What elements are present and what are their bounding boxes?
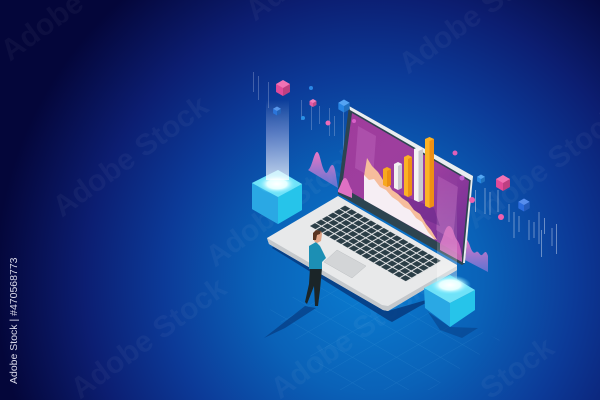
screen chart: [364, 137, 440, 240]
head: [314, 231, 322, 243]
blue cube: [273, 106, 281, 116]
left light beam: [266, 100, 289, 180]
screen table right: [436, 176, 458, 240]
blue dot: [301, 116, 305, 120]
laptop base: [267, 196, 457, 311]
bar chart shadow: [380, 186, 440, 226]
wave on screen bottom left: [338, 178, 352, 198]
pink dot: [469, 197, 475, 203]
bar 4: [414, 147, 423, 202]
keyboard: [309, 205, 442, 282]
hair: [313, 230, 321, 240]
floor grid: [270, 270, 500, 390]
blue cube: [518, 198, 530, 212]
person: [264, 230, 326, 338]
right data ticks: [476, 188, 556, 257]
blue dot: [309, 86, 313, 90]
pink dot: [452, 150, 458, 156]
torso: [309, 242, 326, 269]
bar 1: [383, 167, 391, 187]
trackpad: [324, 250, 366, 278]
right glowing cube: [424, 275, 478, 338]
wave on screen bottom right: [440, 226, 462, 262]
left glowing cube: [252, 170, 302, 224]
blue cube: [477, 174, 485, 184]
screen table left: [355, 126, 376, 178]
watermarks: Adobe Stock: [200, 139, 368, 274]
pink cube: [496, 175, 510, 191]
peach area: [364, 158, 437, 240]
screen display: [342, 113, 469, 256]
purple dot: [460, 176, 464, 180]
legs: [305, 268, 322, 306]
blue cube: [338, 100, 350, 112]
stock id side text: Adobe Stock | #470568773: [8, 257, 20, 384]
white area: [364, 175, 435, 240]
screen bezel: [338, 106, 473, 265]
left purple wave chart: [308, 152, 338, 188]
pink cube: [276, 80, 290, 96]
floating cubes: [273, 80, 530, 220]
laptop shadow: [272, 244, 440, 322]
bar 5: [425, 137, 434, 208]
watermarks: Adobe Stock: [47, 89, 215, 224]
laptop: [267, 106, 473, 311]
pink dot: [498, 214, 504, 220]
right purple wave chart: [465, 238, 488, 272]
bar 3: [404, 155, 412, 197]
pink dot: [326, 120, 330, 126]
pink cube: [310, 99, 316, 107]
right light beam: [437, 175, 457, 287]
purple dot: [352, 119, 356, 123]
left data ticks: [254, 72, 344, 150]
bar 2: [394, 162, 402, 190]
person shadow: [264, 306, 316, 338]
